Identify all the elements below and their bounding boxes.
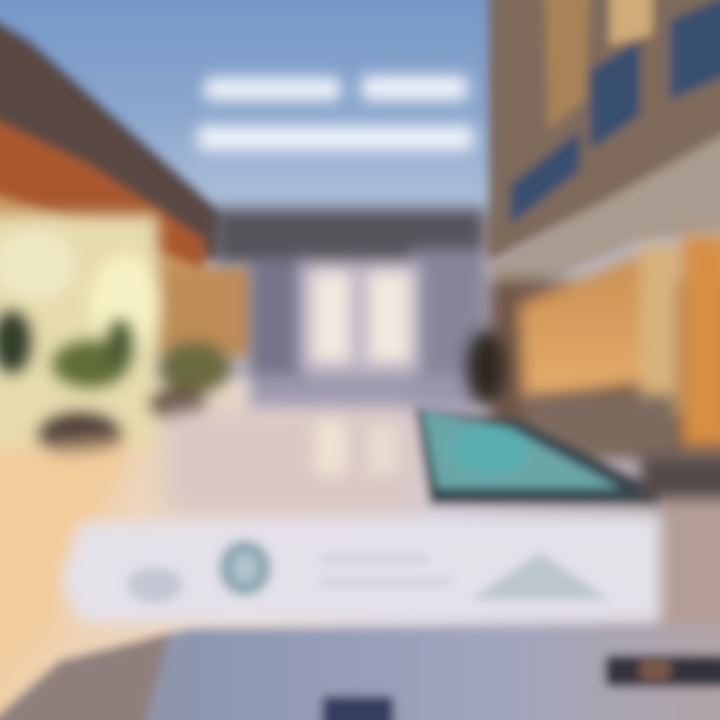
right building: blue windows	[510, 0, 720, 225]
left lobby: bright interior	[0, 215, 250, 450]
sky	[0, 0, 505, 220]
right building: warm glowing interior	[490, 235, 720, 455]
right edge: dark deck	[640, 455, 720, 630]
bottom band: blue-grey foreground	[0, 625, 720, 720]
left building: roof and orange fascia	[0, 10, 250, 350]
white information strip	[60, 515, 660, 622]
centre: far entrance wall	[215, 208, 485, 410]
lounge furniture	[525, 395, 675, 455]
dark tree by the pool	[466, 330, 506, 406]
plants and planters	[0, 310, 231, 460]
floor: reflections	[165, 410, 415, 515]
floor: door reflection	[315, 420, 398, 475]
background: floor base	[0, 380, 720, 720]
strip emblems	[127, 540, 610, 603]
left floor: warm sunlit tiles	[0, 440, 140, 700]
pool	[415, 408, 660, 505]
title block: blurred white heading	[198, 76, 473, 150]
right building: upper facade	[488, 0, 720, 262]
right building: pale balcony band	[490, 125, 720, 300]
dark foreground objects	[322, 655, 720, 720]
centre: glowing doors	[312, 272, 410, 362]
